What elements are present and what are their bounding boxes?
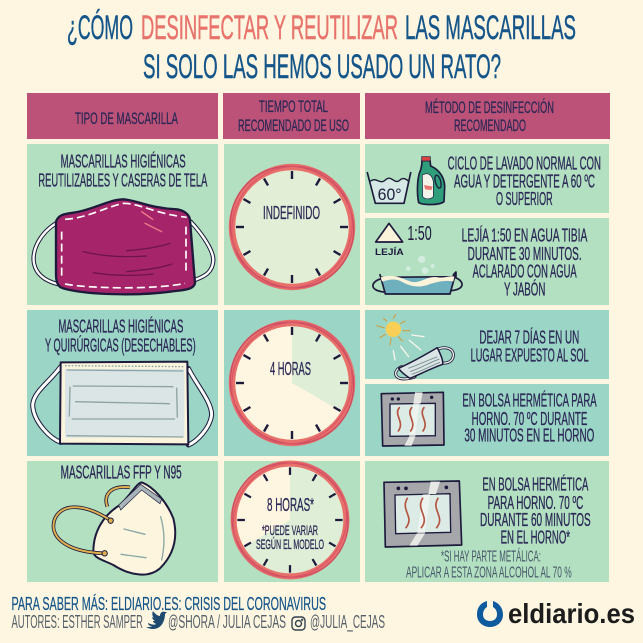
panel: mascarillas quirúrgicas — [27, 310, 218, 456]
icon: washing symbol 60: 60° — [378, 185, 402, 204]
mask type label: quirúrgicas: MASCARILLAS HIGIÉNICAS — [58, 316, 183, 337]
footer: autores — [12, 612, 385, 633]
icon: sun — [377, 314, 410, 345]
method text: lavado: O SUPERIOR — [496, 188, 553, 209]
panel: clock 8 horas: 8 HORAS* — [267, 495, 314, 515]
icon: FFP2 mask — [53, 482, 175, 575]
mask type label: FFP: MASCARILLAS FFP Y N95 — [61, 461, 182, 482]
panel: horno 30 minutos — [365, 384, 609, 456]
footer: autores: @SHORA / JULIA CEJAS — [168, 612, 286, 632]
icon: instagram — [292, 617, 305, 630]
icon: detergent bottle — [417, 157, 445, 205]
title: ¿CÓMO — [67, 9, 133, 47]
table header: tiempo total: RECOMENDADO DE USO — [238, 116, 349, 135]
clock: 8 horas — [210, 440, 370, 600]
icon: washing symbol 60 — [367, 173, 411, 204]
panel: lejía — [365, 218, 609, 305]
clock: 4 horas — [206, 298, 378, 468]
method text: lejía — [462, 225, 588, 300]
logo: eldiario.es: eldiario.es — [508, 598, 635, 629]
footer: autores: @JULIA_CEJAS — [310, 612, 385, 633]
method text: horno 30 minutos — [462, 390, 597, 446]
table header: tiempo total: TIEMPO TOTAL — [259, 97, 328, 116]
table header: método — [365, 93, 610, 139]
mask type label: tela — [38, 150, 208, 191]
title — [67, 9, 576, 86]
icon: mask in the sun — [396, 348, 453, 379]
method text: lejía: Y JABÓN — [504, 279, 545, 300]
icon: mask soaking in water — [373, 256, 462, 294]
icon: oven large — [384, 481, 462, 547]
table header: tipo de mascarilla: TIPO DE MASCARILLA — [75, 109, 178, 128]
icon: bleach triangle: 1:50 — [407, 222, 432, 245]
panel: sol — [365, 310, 609, 379]
clock: indefinido — [206, 142, 378, 312]
panel: clock indefinido — [206, 142, 378, 312]
title: DESINFECTAR Y REUTILIZAR — [141, 9, 398, 47]
method text: horno 60 minutos — [480, 474, 591, 547]
method text: sol — [471, 326, 589, 366]
footnote: parte metálica: *SI HAY PARTE METÁLICA: — [441, 549, 541, 566]
mask type label: tela: MASCARILLAS HIGIÉNICAS — [61, 150, 186, 171]
panel: mascarillas quirúrgicas: Y QUIRÚRGICAS (DESECHABLES) — [45, 335, 196, 356]
table header: tipo de mascarilla — [27, 93, 218, 139]
icon: twitter bird — [146, 611, 167, 629]
table header: tiempo total — [223, 93, 360, 139]
panel: clock indefinido: INDEFINIDO — [263, 203, 320, 223]
icon: white sun rays — [393, 335, 424, 360]
footnote: parte metálica — [406, 549, 572, 581]
footer: autores: AUTORES: ESTHER SAMPER — [12, 612, 143, 632]
table header: método: RECOMENDADO — [454, 116, 526, 135]
method text: horno 60 minutos: EN EL HORNO* — [501, 526, 570, 547]
method text: lavado — [448, 152, 601, 209]
panel: horno 60 minutos — [365, 461, 609, 582]
panel: clock 8 horas: SEGÚN EL MODELO — [256, 536, 324, 552]
panel: clock 4 horas: 4 HORAS — [270, 359, 311, 379]
mask type label: quirúrgicas — [45, 316, 196, 356]
panel: lavado — [365, 144, 609, 213]
mask type label: tela: REUTILIZABLES Y CASERAS DE TELA — [38, 170, 208, 191]
icon: bleach triangle — [375, 222, 432, 257]
icon: surgical mask — [33, 362, 212, 445]
icon: bleach triangle: LEJÍA — [375, 246, 404, 257]
panel: clock 8 horas: *PUEDE VARIAR — [262, 522, 318, 538]
panel: mascarillas de tela — [27, 144, 218, 305]
footer: más información: PARA SABER MÁS: ELDIARIO.ES: CRISIS DEL CORONAVIRUS — [12, 594, 326, 614]
icon: oven — [381, 392, 444, 446]
panel: clock 8 horas — [210, 440, 370, 600]
icon: cloth mask — [34, 199, 213, 294]
panel: clock 4 horas — [206, 298, 378, 468]
panel: mascarillas FFP — [27, 461, 218, 582]
